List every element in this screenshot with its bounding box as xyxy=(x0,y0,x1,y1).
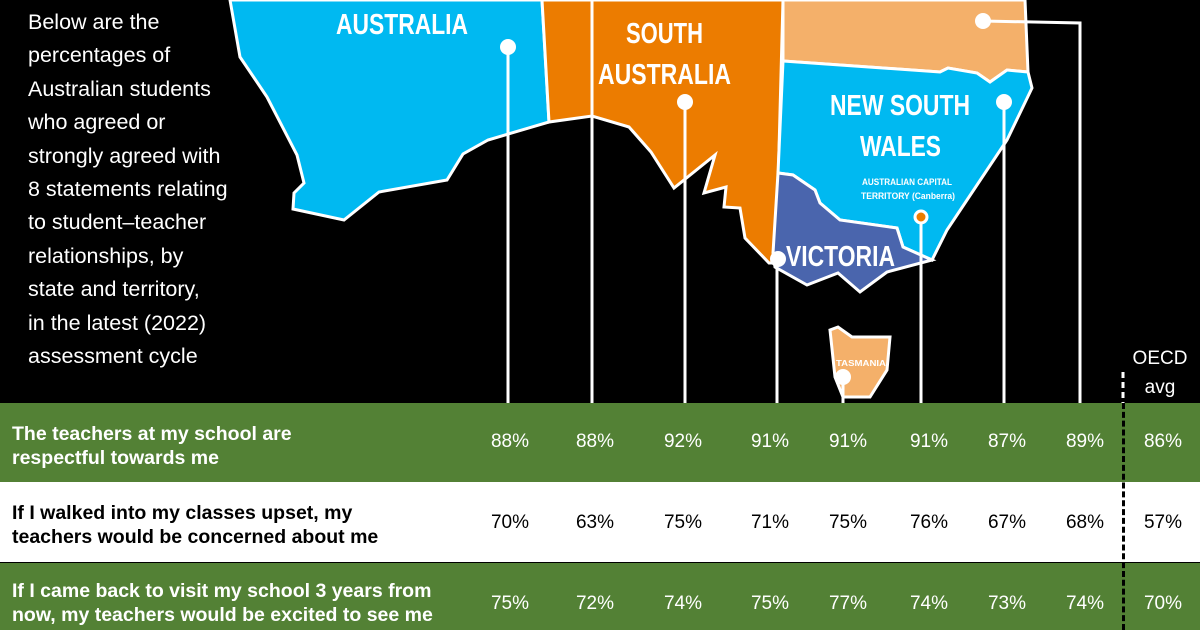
table row 2: If I walked into my classes upset, my xyxy=(12,502,352,524)
table row 2: 75% xyxy=(829,512,867,533)
leader lines xyxy=(508,21,1080,403)
OECD avg heading xyxy=(1133,348,1187,398)
region: tasmania: TASMANIA xyxy=(836,359,886,368)
table row 3 xyxy=(0,563,1200,630)
table row 1: 89% xyxy=(1066,431,1104,452)
OECD avg heading: avg xyxy=(1145,377,1175,398)
table row 3: 74% xyxy=(910,593,948,614)
region: new south wales xyxy=(778,61,1032,260)
table row 1: respectful towards me xyxy=(12,447,219,469)
table row 1: 91% xyxy=(829,431,867,452)
OECD avg heading: OECD xyxy=(1133,348,1187,369)
region: northern territory and south australia: SOUTH xyxy=(626,18,703,50)
region: western australia: AUSTRALIA xyxy=(336,9,468,41)
region: victoria: VICTORIA xyxy=(786,241,895,273)
intro text: percentages of xyxy=(28,43,170,67)
table row 1: The teachers at my school are xyxy=(12,423,292,445)
table row 1: 86% xyxy=(1144,431,1182,452)
intro text: relationships, by xyxy=(28,244,183,268)
intro text: Australian students xyxy=(28,77,211,101)
table row 2: 63% xyxy=(576,512,614,533)
OECD divider xyxy=(1122,403,1125,630)
intro text: who agreed or xyxy=(28,110,165,134)
table row 3: 72% xyxy=(576,593,614,614)
table row 3: 77% xyxy=(829,593,867,614)
table row 3: 73% xyxy=(988,593,1026,614)
OECD divider top xyxy=(1122,372,1124,403)
table row 3: 74% xyxy=(664,593,702,614)
table row 3: 70% xyxy=(1144,593,1182,614)
intro text: assessment cycle xyxy=(28,344,198,368)
region: queensland xyxy=(783,0,1028,82)
region: northern territory and south australia: AUSTRALIA xyxy=(598,59,731,91)
region: new south wales: TERRITORY (Canberra) xyxy=(861,191,955,201)
table row 3: now, my teachers would be excited to see me xyxy=(12,604,433,626)
intro text: state and territory, xyxy=(28,277,200,301)
table row 3: 74% xyxy=(1066,593,1104,614)
table row 1: 88% xyxy=(576,431,614,452)
table row 1: 88% xyxy=(491,431,529,452)
table row 2: 68% xyxy=(1066,512,1104,533)
leader dots xyxy=(500,13,1012,385)
table row 3: If I came back to visit my school 3 years from xyxy=(12,580,431,602)
intro text: in the latest (2022) xyxy=(28,311,206,335)
intro text: Below are the xyxy=(28,10,159,34)
table row 1: 91% xyxy=(751,431,789,452)
region: victoria xyxy=(773,173,932,292)
region: tasmania xyxy=(830,327,890,397)
table row 1 xyxy=(0,403,1200,482)
table row 2: teachers would be concerned about me xyxy=(12,526,378,548)
intro text: to student–teacher xyxy=(28,210,206,234)
table row 2: 71% xyxy=(751,512,789,533)
table row 1: 87% xyxy=(988,431,1026,452)
intro text: 8 statements relating xyxy=(28,177,228,201)
region: new south wales: WALES xyxy=(860,131,941,163)
table row 3: 75% xyxy=(751,593,789,614)
table row 3: 75% xyxy=(491,593,529,614)
table row 2: 76% xyxy=(910,512,948,533)
region: western australia xyxy=(230,0,549,220)
intro text xyxy=(28,10,228,368)
table row 2: 70% xyxy=(491,512,529,533)
region: new south wales: NEW SOUTH xyxy=(830,90,970,122)
table row 2: 57% xyxy=(1144,512,1182,533)
intro text: strongly agreed with xyxy=(28,144,220,168)
table row 2: 75% xyxy=(664,512,702,533)
region: new south wales: AUSTRALIAN CAPITAL xyxy=(862,177,952,187)
table row 2: 67% xyxy=(988,512,1026,533)
table row 1: 92% xyxy=(664,431,702,452)
region: northern territory and south australia xyxy=(542,0,783,263)
table row 2 xyxy=(0,482,1200,562)
table row 1: 91% xyxy=(910,431,948,452)
